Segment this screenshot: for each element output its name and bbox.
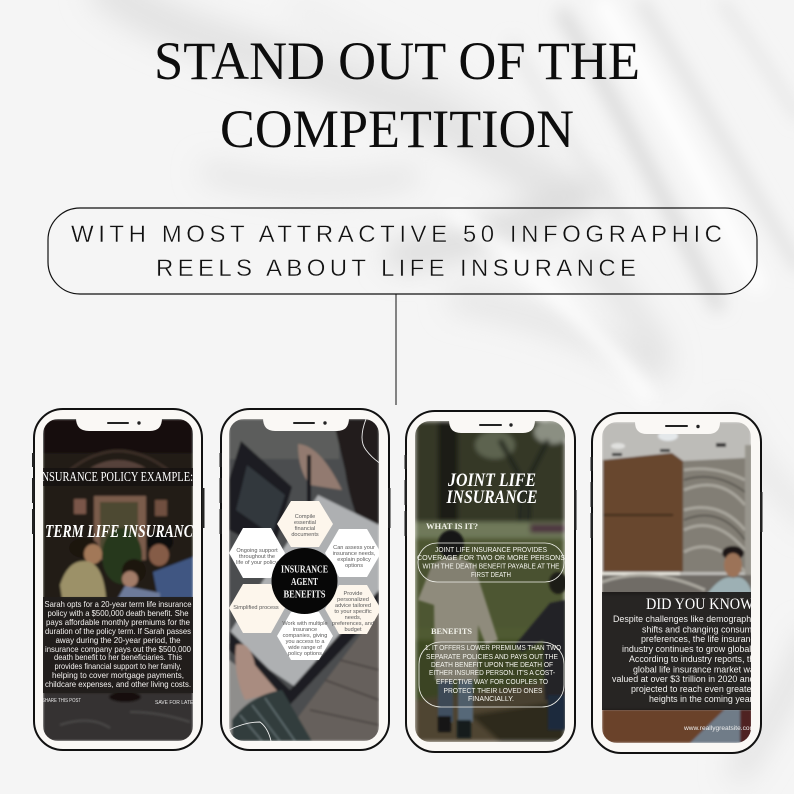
benefits pill: SEPARATE POLICIES AND PAYS OUT THE: [426, 652, 558, 661]
body text: policy with a $500,000 death benefit. She: [48, 608, 189, 618]
what is it pill: JOINT LIFE INSURANCE PROVIDES: [435, 545, 547, 554]
hexagon: compile documents: essential: [294, 520, 316, 526]
body text: death benefit to her beneficiaries. This: [54, 652, 182, 662]
hexagon: assess needs: options: [345, 563, 363, 569]
benefits pill: 1. IT OFFERS LOWER PREMIUMS THAN TWO: [425, 643, 561, 652]
benefits pill: DEATH BENEFIT UPON THE DEATH OF: [431, 660, 554, 669]
heading band: [43, 468, 193, 486]
hexagon: simplified process: Simplified process: [233, 605, 279, 611]
central circle: INSURANCE: [281, 564, 328, 576]
body text: [44, 599, 192, 689]
did you know body: valued at over $3 trillion in 2020 and is: [612, 674, 764, 684]
body text: Sarah opts for a 20-year term life insurance: [44, 599, 192, 609]
body text: helping to cover mortgage payments,: [52, 670, 184, 680]
did you know heading: DID YOU KNOW?: [646, 596, 760, 613]
family photo: [43, 419, 193, 741]
phone 3: joint life insurance: [404, 411, 576, 752]
subtitle pill: [48, 208, 757, 294]
hexagon: personalized advice: budget: [344, 627, 362, 633]
decorative arc top: [362, 419, 381, 464]
hexagon: assess needs: Can assess your: [333, 545, 375, 551]
hexagon: multiple companies: you access to a: [286, 639, 325, 645]
what is it pill: WITH THE DEATH BENEFIT PAYABLE AT THE: [422, 562, 560, 570]
did you know body: Despite challenges like demographic: [613, 614, 758, 624]
did you know body: industry continues to grow globally.: [622, 644, 759, 654]
decorative arc bottom: [229, 722, 271, 741]
share label: SHARE THIS POST: [42, 698, 81, 704]
joint life heading: [446, 474, 537, 503]
did you know body: projected to reach even greater: [631, 684, 754, 694]
body text: childcare expenses, and other living costs.: [45, 679, 191, 689]
body text: pays affordable monthly premiums for the: [46, 617, 190, 627]
title: STAND OUT OF THE: [154, 31, 640, 91]
hexagon: ongoing support: life of your policy: [236, 560, 278, 566]
notch 1: [76, 418, 162, 431]
save label: SAVE FOR LATER: [155, 700, 197, 706]
did you know body: [612, 616, 751, 704]
body text: insurance company pays out the $500,000: [45, 644, 191, 654]
hexagon: multiple companies: policy options: [288, 651, 322, 657]
hexagon: multiple companies: companies, giving: [283, 633, 327, 639]
benefits pill: PROTECT THEIR LOVED ONES: [444, 686, 543, 695]
screen 4 content: [602, 422, 764, 743]
did you know body: According to industry reports, the: [629, 654, 759, 664]
interior photo: [602, 422, 752, 743]
park photo: [415, 420, 570, 742]
what is it pill: FIRST DEATH: [471, 570, 511, 579]
hexagon: compile documents: Compile: [295, 514, 315, 520]
hexagon: personalized advice: personalized: [337, 597, 369, 603]
hexagon: multiple companies: wide range of: [287, 645, 322, 651]
hexagon: compile documents: documents: [291, 532, 319, 538]
hexagon: compile documents: [277, 501, 333, 547]
benefits pill: EFFECTIVE WAY FOR COUPLES TO: [436, 677, 548, 686]
hexagon: personalized advice: advice tailored: [335, 603, 371, 609]
notch 2: [263, 418, 349, 431]
benefits label: BENEFITS: [431, 626, 472, 636]
term life heading: TERM LIFE INSURANCE: [45, 521, 202, 541]
phone 1: term life insurance: [32, 409, 204, 750]
hexagon: personalized advice: to your specific: [334, 609, 372, 615]
subtitle pill: REELS ABOUT LIFE INSURANCE: [156, 255, 636, 282]
children figures: [418, 530, 567, 738]
hexagon: assess needs: insurance needs,: [333, 551, 376, 557]
did you know body: heights in the coming years.: [649, 694, 760, 704]
benefits pill: EITHER INSURED PERSON. IT'S A COST-: [429, 668, 556, 677]
phone 2: insurance agent benefits: [220, 409, 390, 750]
screen 1 content: [38, 419, 202, 741]
hexagon: ongoing support: Ongoing support: [236, 548, 278, 554]
body text: duration of the policy term. If Sarah passes: [45, 626, 191, 636]
what is it label: WHAT IS IT?: [426, 521, 478, 531]
did you know body: preferences, the life insurance: [641, 634, 760, 644]
hexagon: assess needs: [325, 529, 381, 577]
did you know body: shifts and changing consumer: [642, 624, 760, 634]
hexagon: ongoing support: throughout the: [239, 554, 275, 560]
notch 3: [449, 420, 535, 433]
joint life heading: JOINT LIFE: [447, 470, 536, 491]
body band: [43, 597, 193, 693]
did you know body: global life insurance market was: [633, 664, 760, 674]
benefits pill: [419, 642, 564, 707]
body text: provides financial support to her family,: [54, 661, 182, 671]
hexagon: simplified process: [229, 584, 285, 633]
central circle: [272, 548, 338, 614]
screen 3 content: [415, 420, 570, 742]
title: [154, 31, 640, 159]
hexagon: multiple companies: [277, 612, 333, 660]
hexagon: personalized advice: Provide: [344, 591, 362, 597]
body text: away during the 20-year period, the: [56, 635, 181, 645]
what is it pill: COVERAGE FOR TWO OR MORE PERSONS: [417, 553, 565, 562]
text band: [602, 592, 752, 710]
phone 4: did you know: [590, 413, 764, 753]
hexagon: multiple companies: insurance: [293, 627, 317, 633]
hexagon: multiple companies: Work with multiple: [282, 621, 328, 627]
connector line: [395, 294, 397, 405]
title: COMPETITION: [220, 99, 574, 159]
hexagon: assess needs: explain policy: [337, 557, 371, 563]
policy example heading: INSURANCE POLICY EXAMPLE:: [38, 470, 193, 485]
joint life heading: INSURANCE: [446, 487, 538, 508]
central circle: AGENT: [291, 577, 318, 588]
hexagon: compile documents: financial: [295, 526, 315, 532]
subtitle pill: WITH MOST ATTRACTIVE 50 INFOGRAPHIC: [71, 221, 722, 248]
screen 2 content: [225, 419, 381, 741]
hexagon: ongoing support: [229, 528, 285, 578]
what is it pill: [417, 543, 565, 582]
central circle: BENEFITS: [284, 590, 326, 600]
notch 4: [635, 422, 720, 434]
hexagon: personalized advice: [325, 585, 381, 634]
website: www.reallygreatsite.com: [683, 725, 756, 732]
benefits pill: FINANCIALLY.: [468, 694, 514, 703]
hexagon: personalized advice: preferences, and: [332, 621, 374, 627]
hexagon: personalized advice: needs,: [345, 615, 362, 621]
desk photo: [225, 419, 379, 741]
